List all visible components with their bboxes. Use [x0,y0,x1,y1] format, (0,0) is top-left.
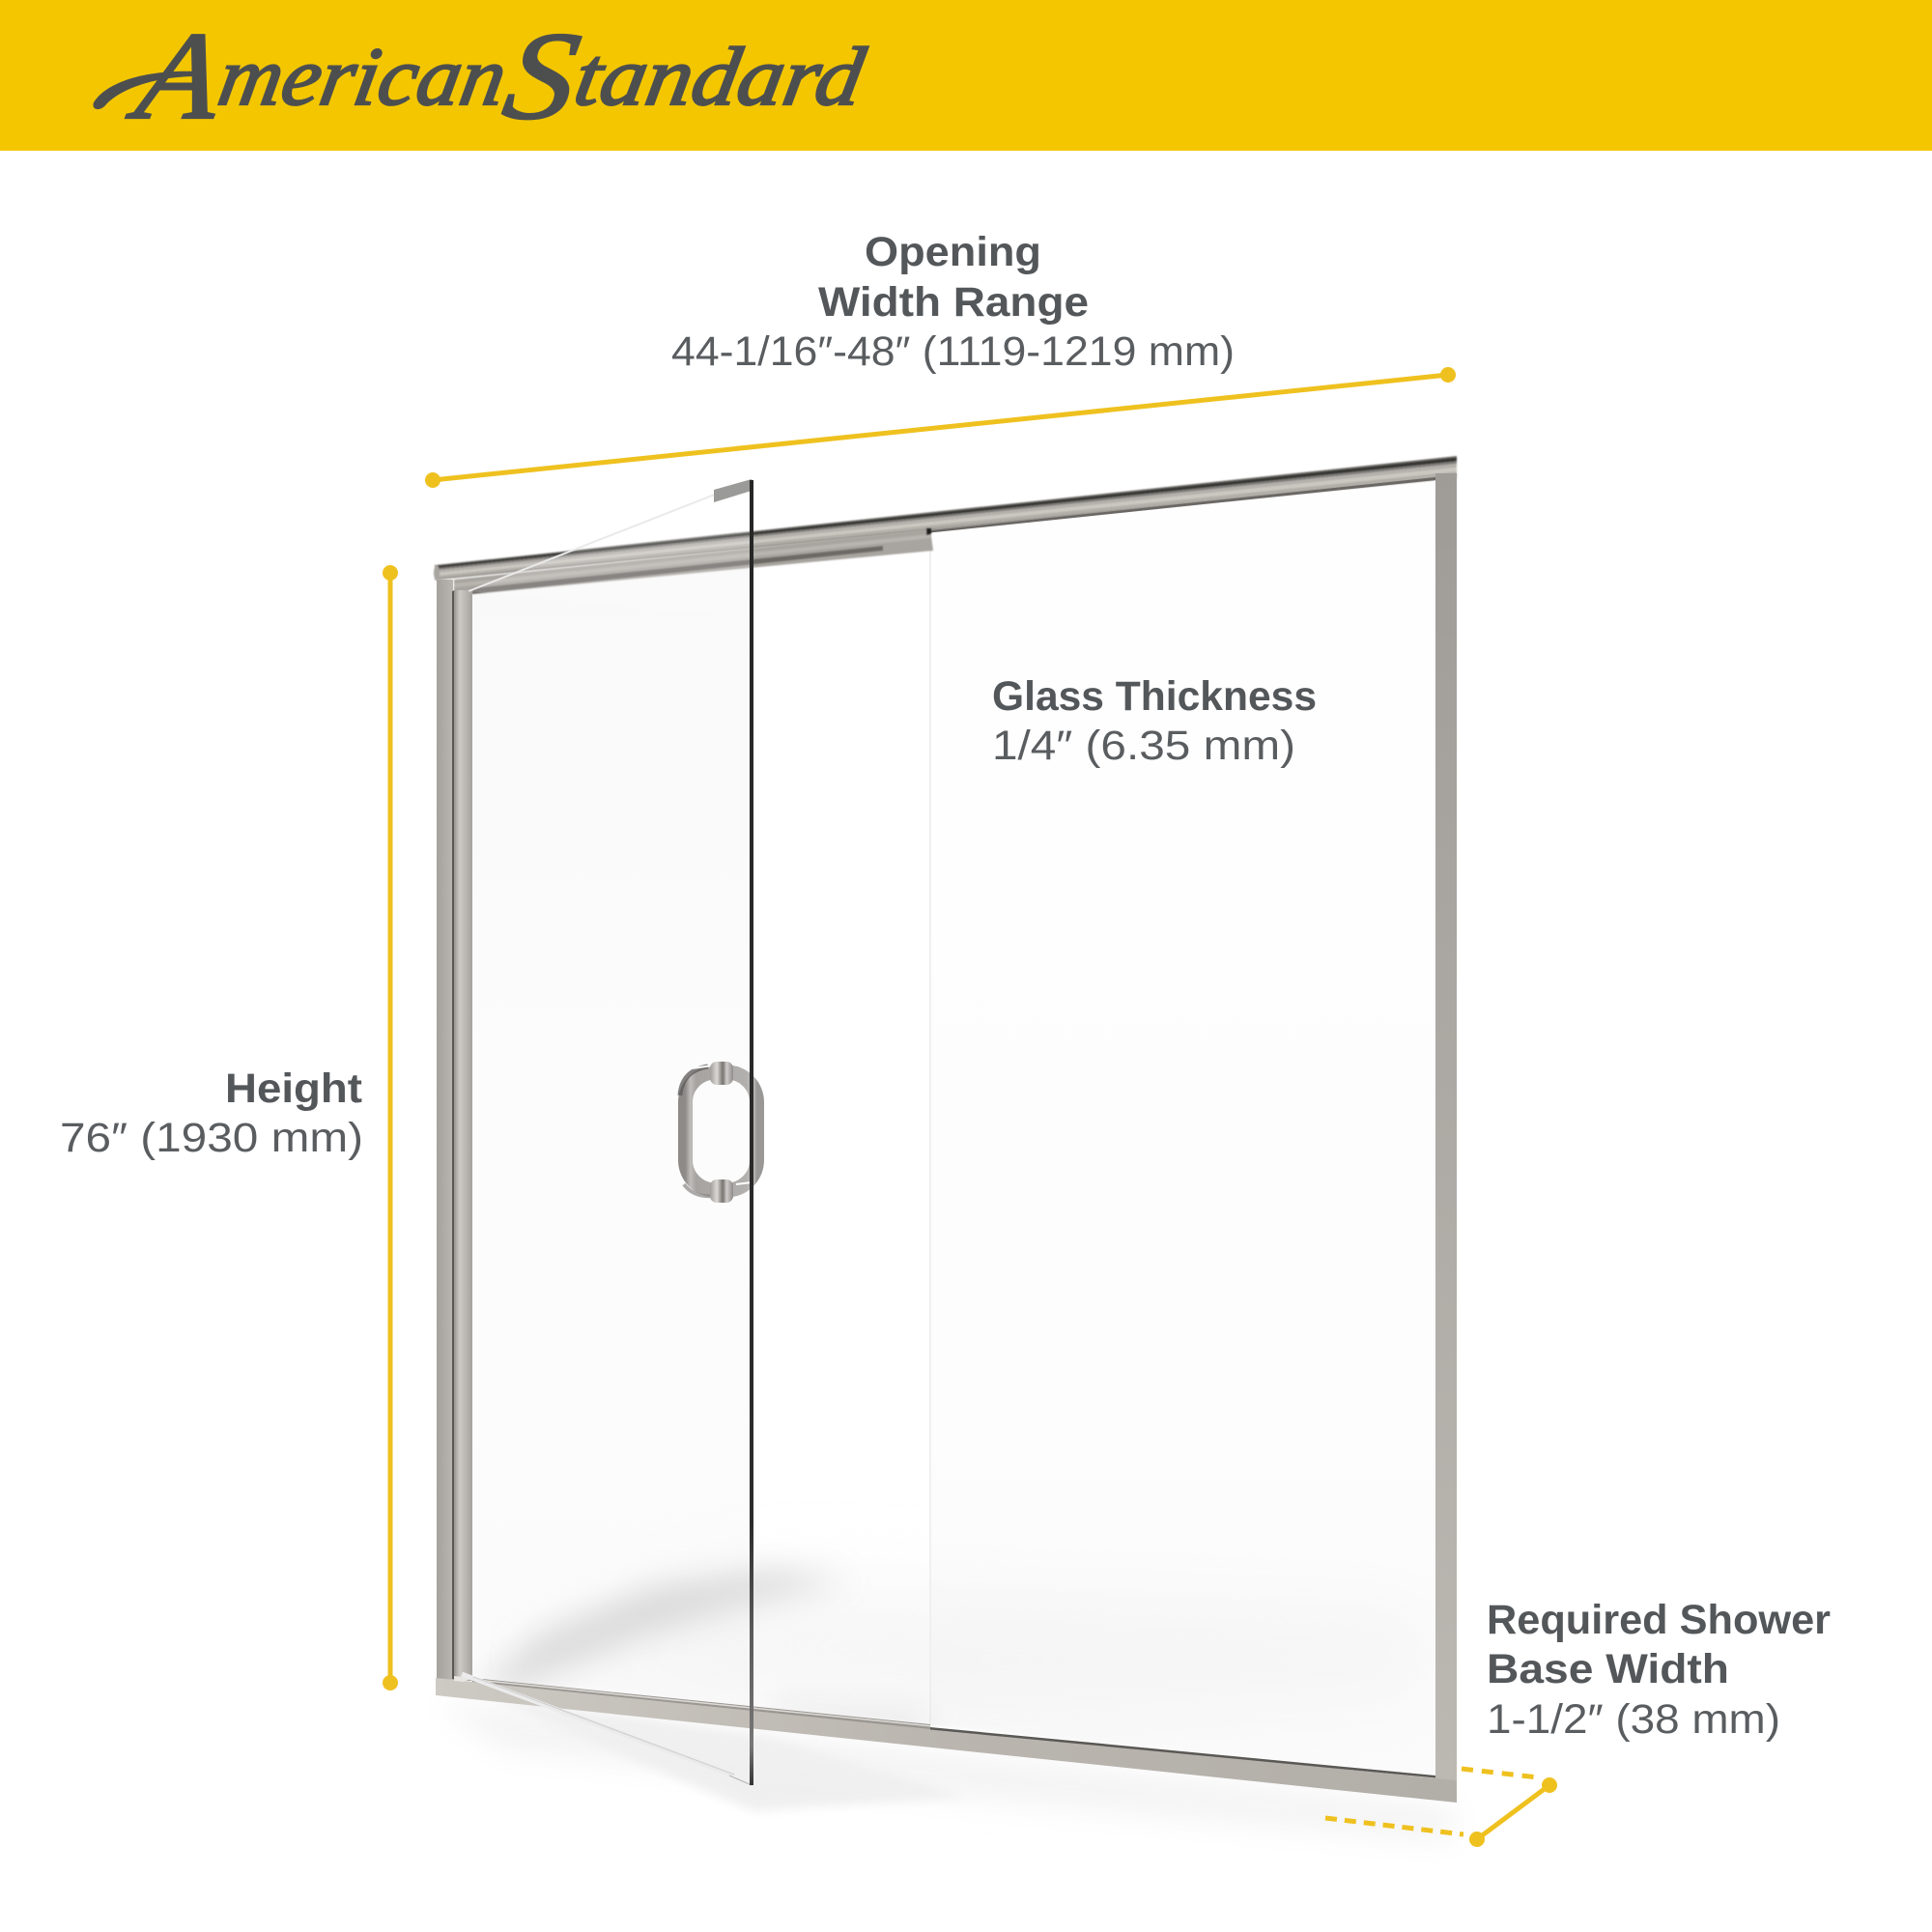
floor shadow [436,1570,1457,1840]
right wall post [1435,473,1457,1783]
header banner [0,0,1932,151]
dimension: height line [383,565,398,1690]
door header [454,528,933,596]
bottom track [436,1676,1457,1803]
label: opening width range: Width Range [818,279,1089,326]
label: opening width range: Opening [865,229,1041,275]
label: glass thickness: 1/4″ (6.35 mm) [992,723,1295,769]
label: height [60,1065,363,1161]
label: opening width range [671,229,1235,375]
door edge hinge lines [462,480,752,1785]
left wall post [437,580,472,1681]
label: required shower base width: Required Shower [1487,1597,1831,1643]
logo: American Standard: S [495,7,588,146]
panel: door glass [472,565,752,1706]
door handle [680,1062,757,1203]
label: required shower base width [1487,1597,1831,1743]
logo: American Standard: tandard [568,31,871,123]
door top bracket [714,479,752,502]
panel: fixed glass [930,480,1436,1776]
logo: American Standard: A [120,7,234,146]
door glass edge [750,480,753,1785]
top rail [434,456,1457,581]
label: required shower base width: Base Width [1487,1646,1729,1692]
label: glass thickness: Glass Thickness [992,673,1317,720]
right header section [930,477,1435,533]
label: glass thickness [992,673,1317,769]
label: height: 76″ (1930 mm) [60,1115,363,1161]
dimension: opening width line [425,367,1456,488]
label: height: Height [225,1065,362,1112]
label: opening width range: 44-1/16″-48″ (1119-1219 mm) [671,328,1235,375]
label: required shower base width: 1-1/2″ (38 mm) [1487,1696,1780,1743]
logo: American Standard: merican [213,31,513,123]
dimension: base width marker [1325,1769,1557,1847]
logo: American Standard [93,7,876,146]
